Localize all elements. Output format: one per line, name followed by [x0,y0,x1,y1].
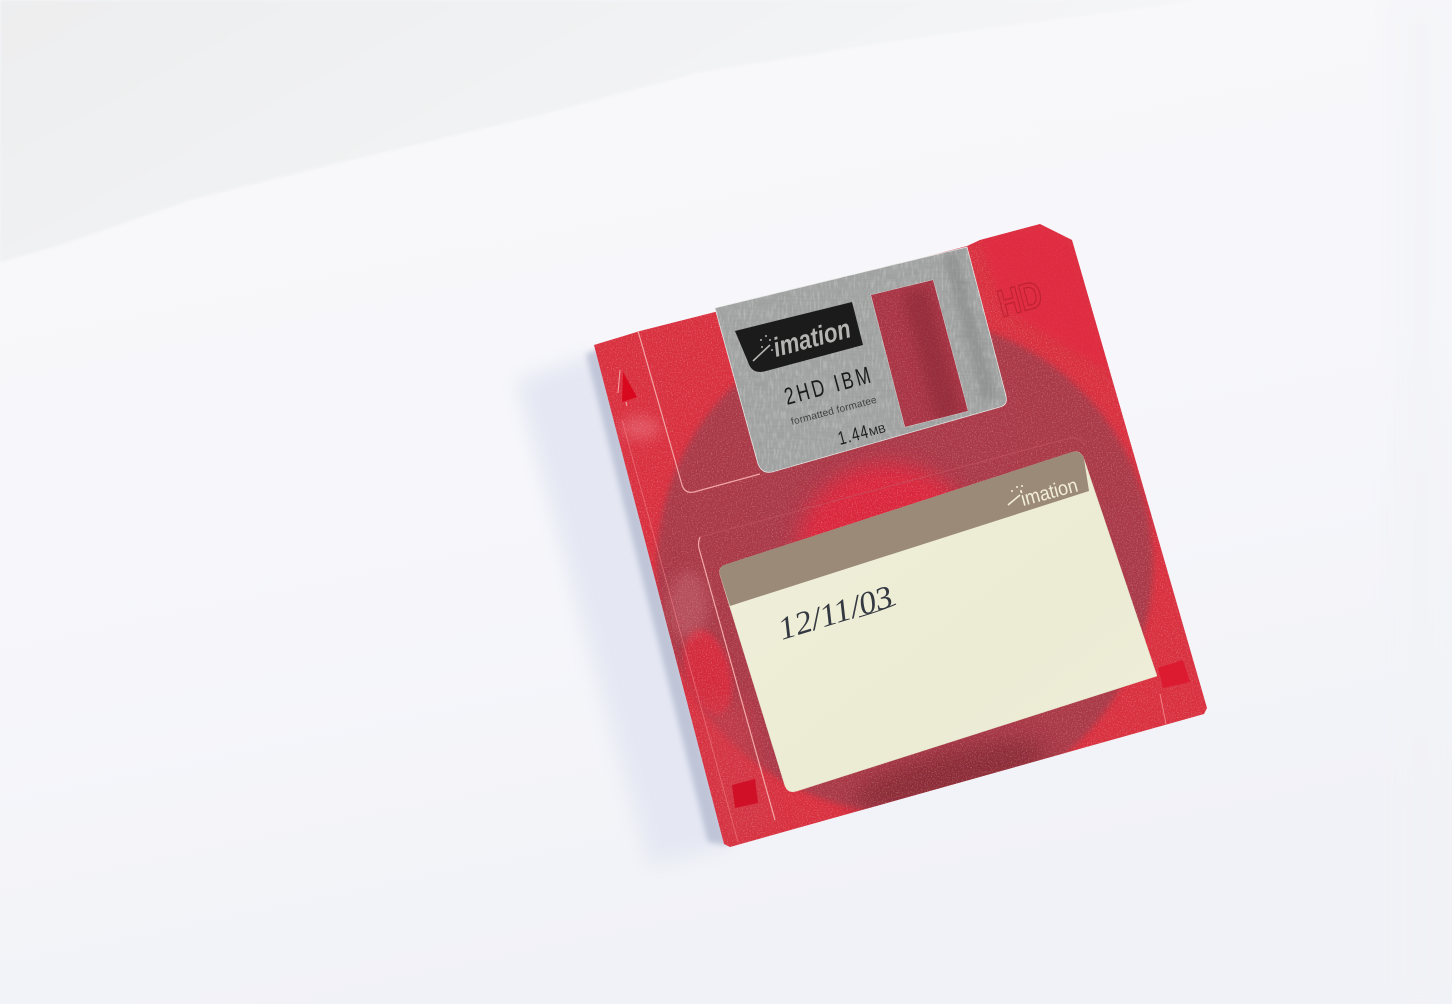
left edge rail lines [638,331,760,492]
icon: write-protect hole bottom right [1158,660,1190,688]
capacity text: 1.44 [836,421,870,449]
brand sparkle icon [753,335,773,361]
label recess line [700,438,1085,537]
label brand text: imation [1019,475,1080,511]
bright corner top right [980,224,1110,372]
floppy disk body [590,220,1210,850]
bright patch lower left [682,628,734,716]
dark lower rim [850,734,1048,812]
grain texture [590,220,1210,850]
icon: direction arrow [618,370,637,406]
label brown band [720,452,1089,606]
brand text: imation [770,313,854,363]
lower left rail tone [710,700,760,761]
shutter window shading [871,280,968,427]
date underline [859,604,896,617]
format text: formatted formatee [790,395,878,428]
paper label [720,452,1157,792]
photo: red floppy disk on white paper [0,0,1207,868]
handwritten date: 12/11/03 [774,578,897,647]
black brand plate [735,302,863,372]
magnetic disc seen through the shell [657,317,1153,813]
central hub [788,454,962,544]
metal brushed texture [716,249,1006,472]
capacity unit: MB [868,423,887,439]
model text: 2HD IBM [782,362,873,411]
disk cast shadow [515,348,730,866]
icon: HD logo embossed: HD [993,274,1047,326]
metal shutter [714,246,1007,473]
icon: write-protect hole bottom left [732,779,758,808]
dust patches [620,416,660,440]
label sparkle icon [1008,485,1023,505]
